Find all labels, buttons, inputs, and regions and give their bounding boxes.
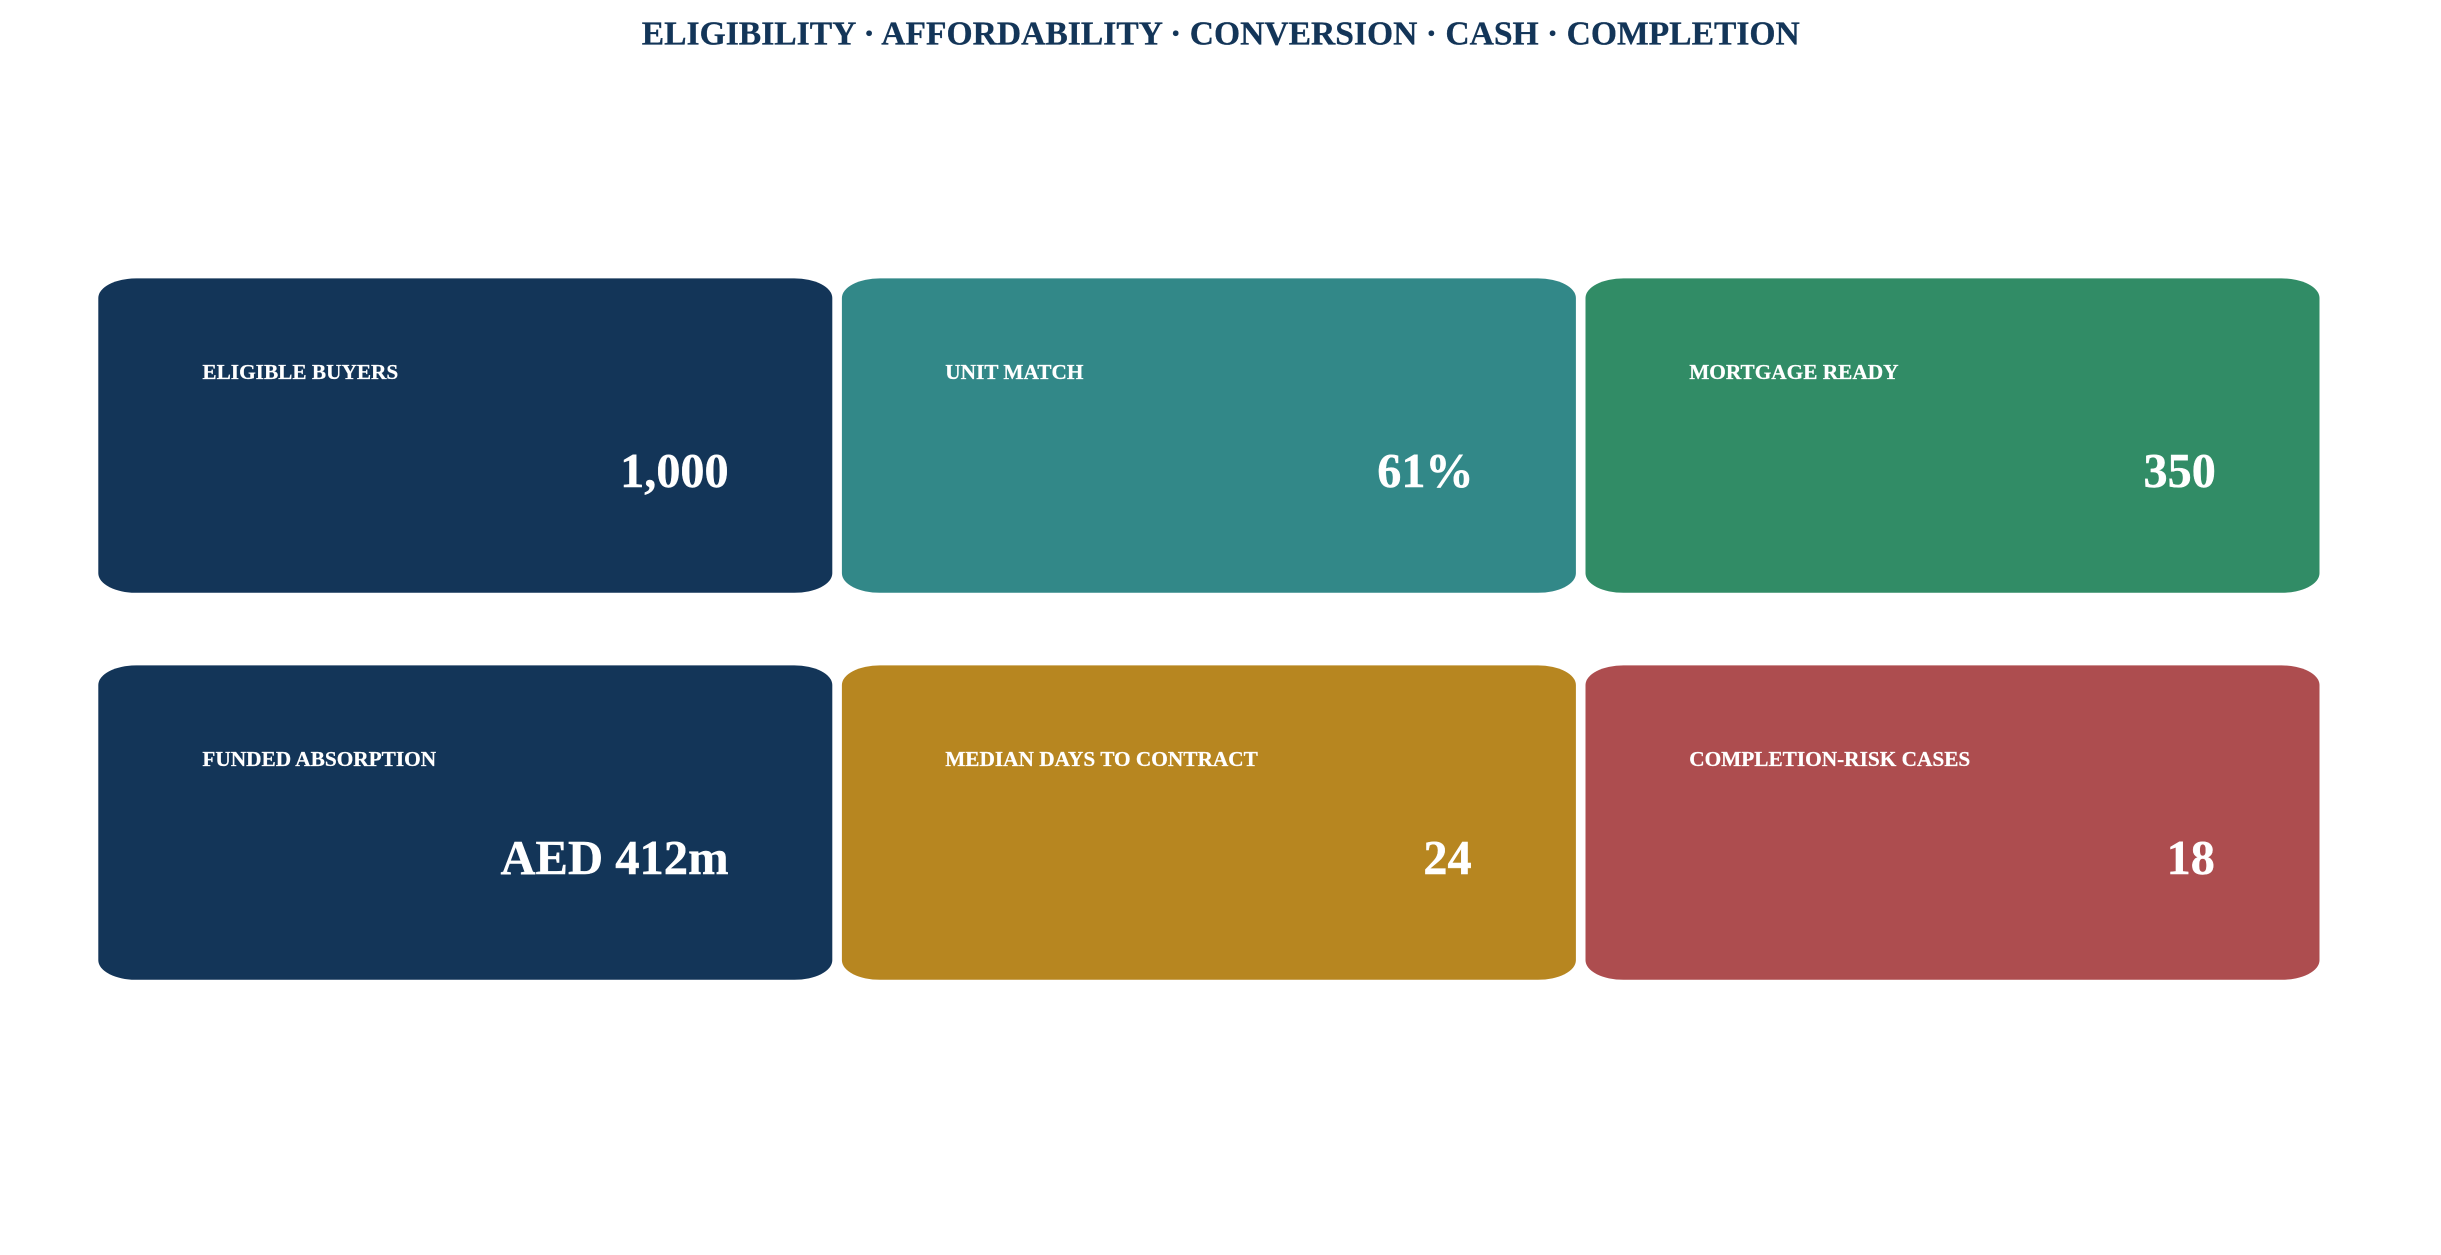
value: 18: 18 [2167,832,2215,885]
panel: completion-risk cases [1586,665,2320,980]
title: ELIGIBILITY · AFFORDABILITY · CONVERSION · CASH · COMPLETION [642,16,1800,52]
panel: eligible buyers [98,278,832,593]
label: unit match: UNIT MATCH [945,360,1084,384]
value: 350: 350 [2144,445,2216,498]
label: completion-risk cases: COMPLETION-RISK CASES [1689,747,1970,771]
value: AED 412m: AED 412m [500,831,729,885]
panel: mortgage ready [1586,278,2320,593]
panel: unit match [842,278,1576,593]
value: 1,000: 1,000 [620,445,729,498]
panel: funded absorption [98,665,832,980]
value: 24: 24 [1423,832,1472,885]
panel: median days to contract [842,665,1576,980]
label: funded absorption: FUNDED ABSORPTION [202,747,437,771]
label: median days to contract: MEDIAN DAYS TO CONTRACT [945,747,1258,771]
label: mortgage ready: MORTGAGE READY [1689,360,1898,384]
label: eligible buyers: ELIGIBLE BUYERS [202,360,398,384]
value: 61%: 61% [1377,445,1474,498]
